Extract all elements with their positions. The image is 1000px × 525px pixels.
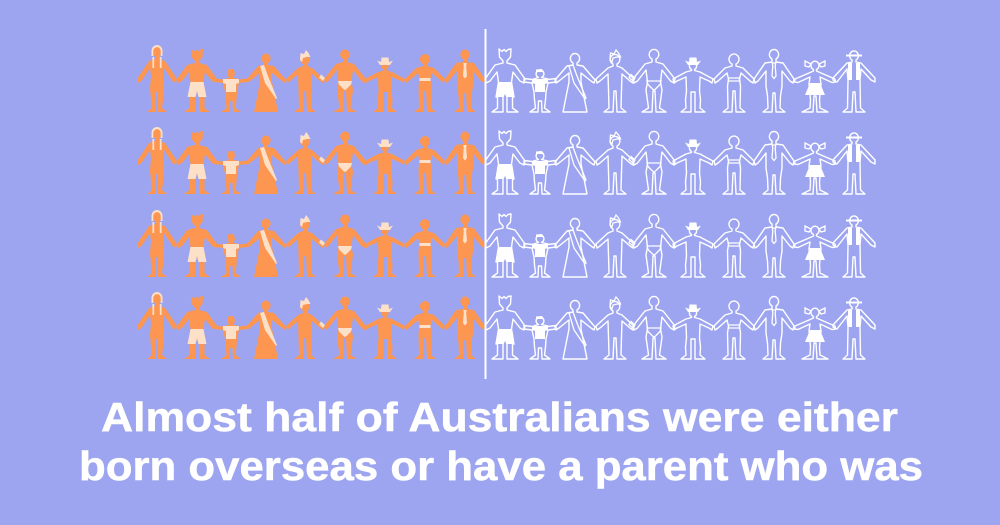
- headline: [79, 394, 923, 489]
- row 4 of people: orange and white: [137, 292, 875, 359]
- row 1 of people: orange and white: [137, 45, 875, 112]
- vertical divider line: [484, 29, 486, 379]
- row 3 of people: orange and white: [137, 210, 875, 277]
- row 2 of people: orange and white: [137, 127, 875, 194]
- headline: Almost half of Australians were either: [101, 394, 898, 440]
- headline: born overseas or have a parent who was: [79, 443, 923, 489]
